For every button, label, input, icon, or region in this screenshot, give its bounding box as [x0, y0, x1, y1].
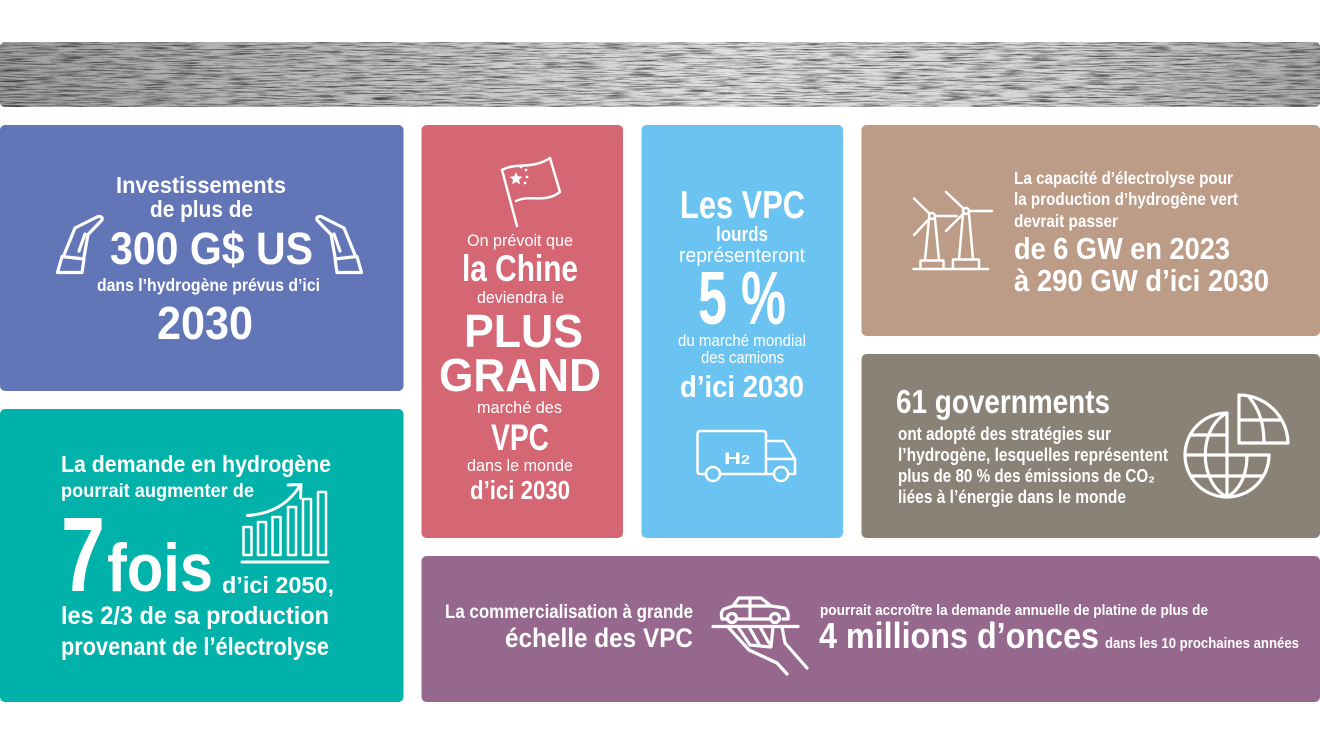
demand text: provenant de l’électrolyse [61, 633, 329, 661]
trucks text: 5 [698, 256, 727, 340]
China text: d’ici 2030 [470, 475, 570, 505]
icon: hydrogen truck [698, 431, 795, 481]
demand text: 7 [61, 496, 105, 614]
governments text [896, 383, 1168, 507]
China text [439, 231, 601, 505]
electrolysis text: à 290 GW d’ici 2030 [1014, 263, 1269, 298]
demand text: fois [107, 530, 213, 606]
commercialisation text: La commercialisation à grande [445, 601, 693, 623]
icon: left protecting hand [58, 216, 102, 272]
governments text: liées à l’énergie dans le monde [898, 487, 1126, 507]
trucks text: lourds [716, 224, 768, 246]
panel: governments [862, 354, 1320, 538]
icon: wind turbines [914, 192, 992, 269]
platinum text [819, 602, 1299, 656]
China text: dans le monde [467, 456, 573, 475]
demand text [61, 451, 334, 661]
icon: globe with detached quarter [1185, 395, 1288, 497]
trucks text: Les VPC [680, 184, 805, 227]
investments text: dans l’hydrogène prévus d’ici [97, 275, 320, 295]
trucks text: représenteront [679, 245, 805, 267]
China text: la Chine [462, 248, 578, 289]
icon: car held on a platinum hand [713, 598, 807, 674]
panel: heavy trucks [642, 125, 843, 538]
commercialisation text: échelle des VPC [505, 623, 693, 653]
investments text: 2030 [157, 297, 253, 349]
investments text: de plus de [150, 196, 253, 222]
China text: PLUS [464, 305, 583, 357]
icon: right protecting hand [317, 216, 362, 272]
platinum text: dans les 10 prochaines années [1105, 635, 1299, 652]
electrolysis text: de 6 GW en 2023 [1014, 231, 1230, 266]
China text: GRAND [439, 349, 601, 401]
icon: Chinese flag [502, 158, 560, 226]
demand text: les 2/3 de sa production [61, 602, 329, 630]
icon: hydrogen truck: H [724, 449, 741, 468]
electrolysis text: devrait passer [1014, 211, 1118, 231]
China text: On prévoit que [467, 231, 573, 250]
trucks text: % [741, 256, 786, 340]
electrolysis text: la production d’hydrogène vert [1014, 189, 1238, 209]
China text: VPC [491, 417, 549, 458]
panel: hydrogen demand [0, 409, 404, 702]
investments text [97, 172, 320, 349]
governments text: 61 governments [896, 383, 1110, 420]
trucks text: d’ici 2030 [680, 369, 804, 404]
China text: deviendra le [477, 288, 564, 307]
electrolysis text [1014, 168, 1269, 298]
governments text: ont adopté des stratégies sur [898, 424, 1111, 444]
demand text: La demande en hydrogène [61, 451, 331, 477]
electrolysis text: La capacité d’électrolyse pour [1014, 168, 1233, 188]
investments text: Investissements [116, 172, 286, 198]
China text: marché des [477, 398, 562, 417]
brushed metal header band [0, 42, 1320, 107]
panel: investments [0, 125, 404, 391]
icon: hydrogen truck: 2 [741, 452, 750, 467]
demand text: d’ici 2050, [222, 572, 334, 598]
platinum text: pourrait accroître la demande annuelle de platine de plus de [820, 602, 1208, 619]
investments text: 300 G$ US [110, 223, 313, 274]
governments text: plus de 80 % des émissions de CO₂ [898, 466, 1155, 486]
platinum text: 4 millions d’onces [819, 615, 1099, 656]
panel: electrolysis capacity [862, 125, 1320, 336]
trucks text: des camions [701, 348, 784, 367]
panel: platinum demand [422, 556, 1320, 702]
trucks text [678, 184, 806, 404]
demand text: pourrait augmenter de [61, 481, 254, 502]
governments text: l’hydrogène, lesquelles représentent [898, 445, 1168, 465]
trucks text: du marché mondial [678, 331, 806, 350]
panel: China [422, 125, 623, 538]
icon: rising bar chart [242, 484, 328, 562]
commercialisation text [445, 601, 693, 653]
